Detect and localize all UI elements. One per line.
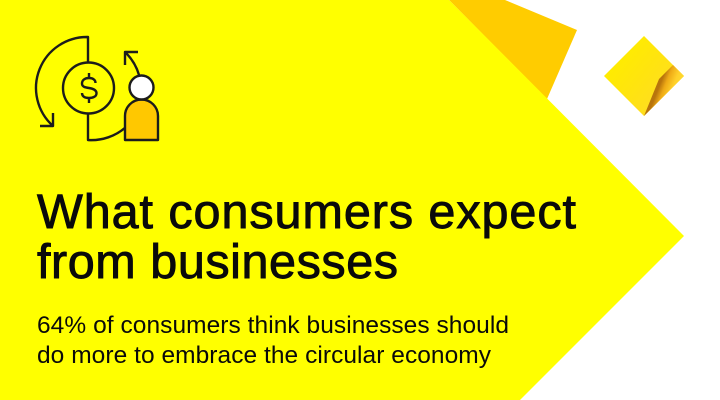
subheading text: 64% of consumers think businesses should bbox=[37, 312, 509, 339]
heading: from businesses bbox=[37, 235, 398, 289]
icon: brand logo diamond bbox=[604, 36, 684, 116]
icon: dollar coin bbox=[63, 62, 114, 114]
heading: What consumers expect bbox=[37, 185, 577, 239]
panel: orange folded shape bbox=[449, 0, 577, 99]
subheading text: do more to embrace the circular economy bbox=[37, 342, 492, 369]
subheading text bbox=[37, 312, 509, 369]
icon: left cycle arrow bbox=[36, 37, 88, 126]
icon: person bbox=[125, 76, 158, 140]
icon: circular economy money and person bbox=[36, 37, 158, 140]
icon: lower cycle arrow bbox=[88, 52, 139, 140]
heading bbox=[37, 185, 577, 289]
